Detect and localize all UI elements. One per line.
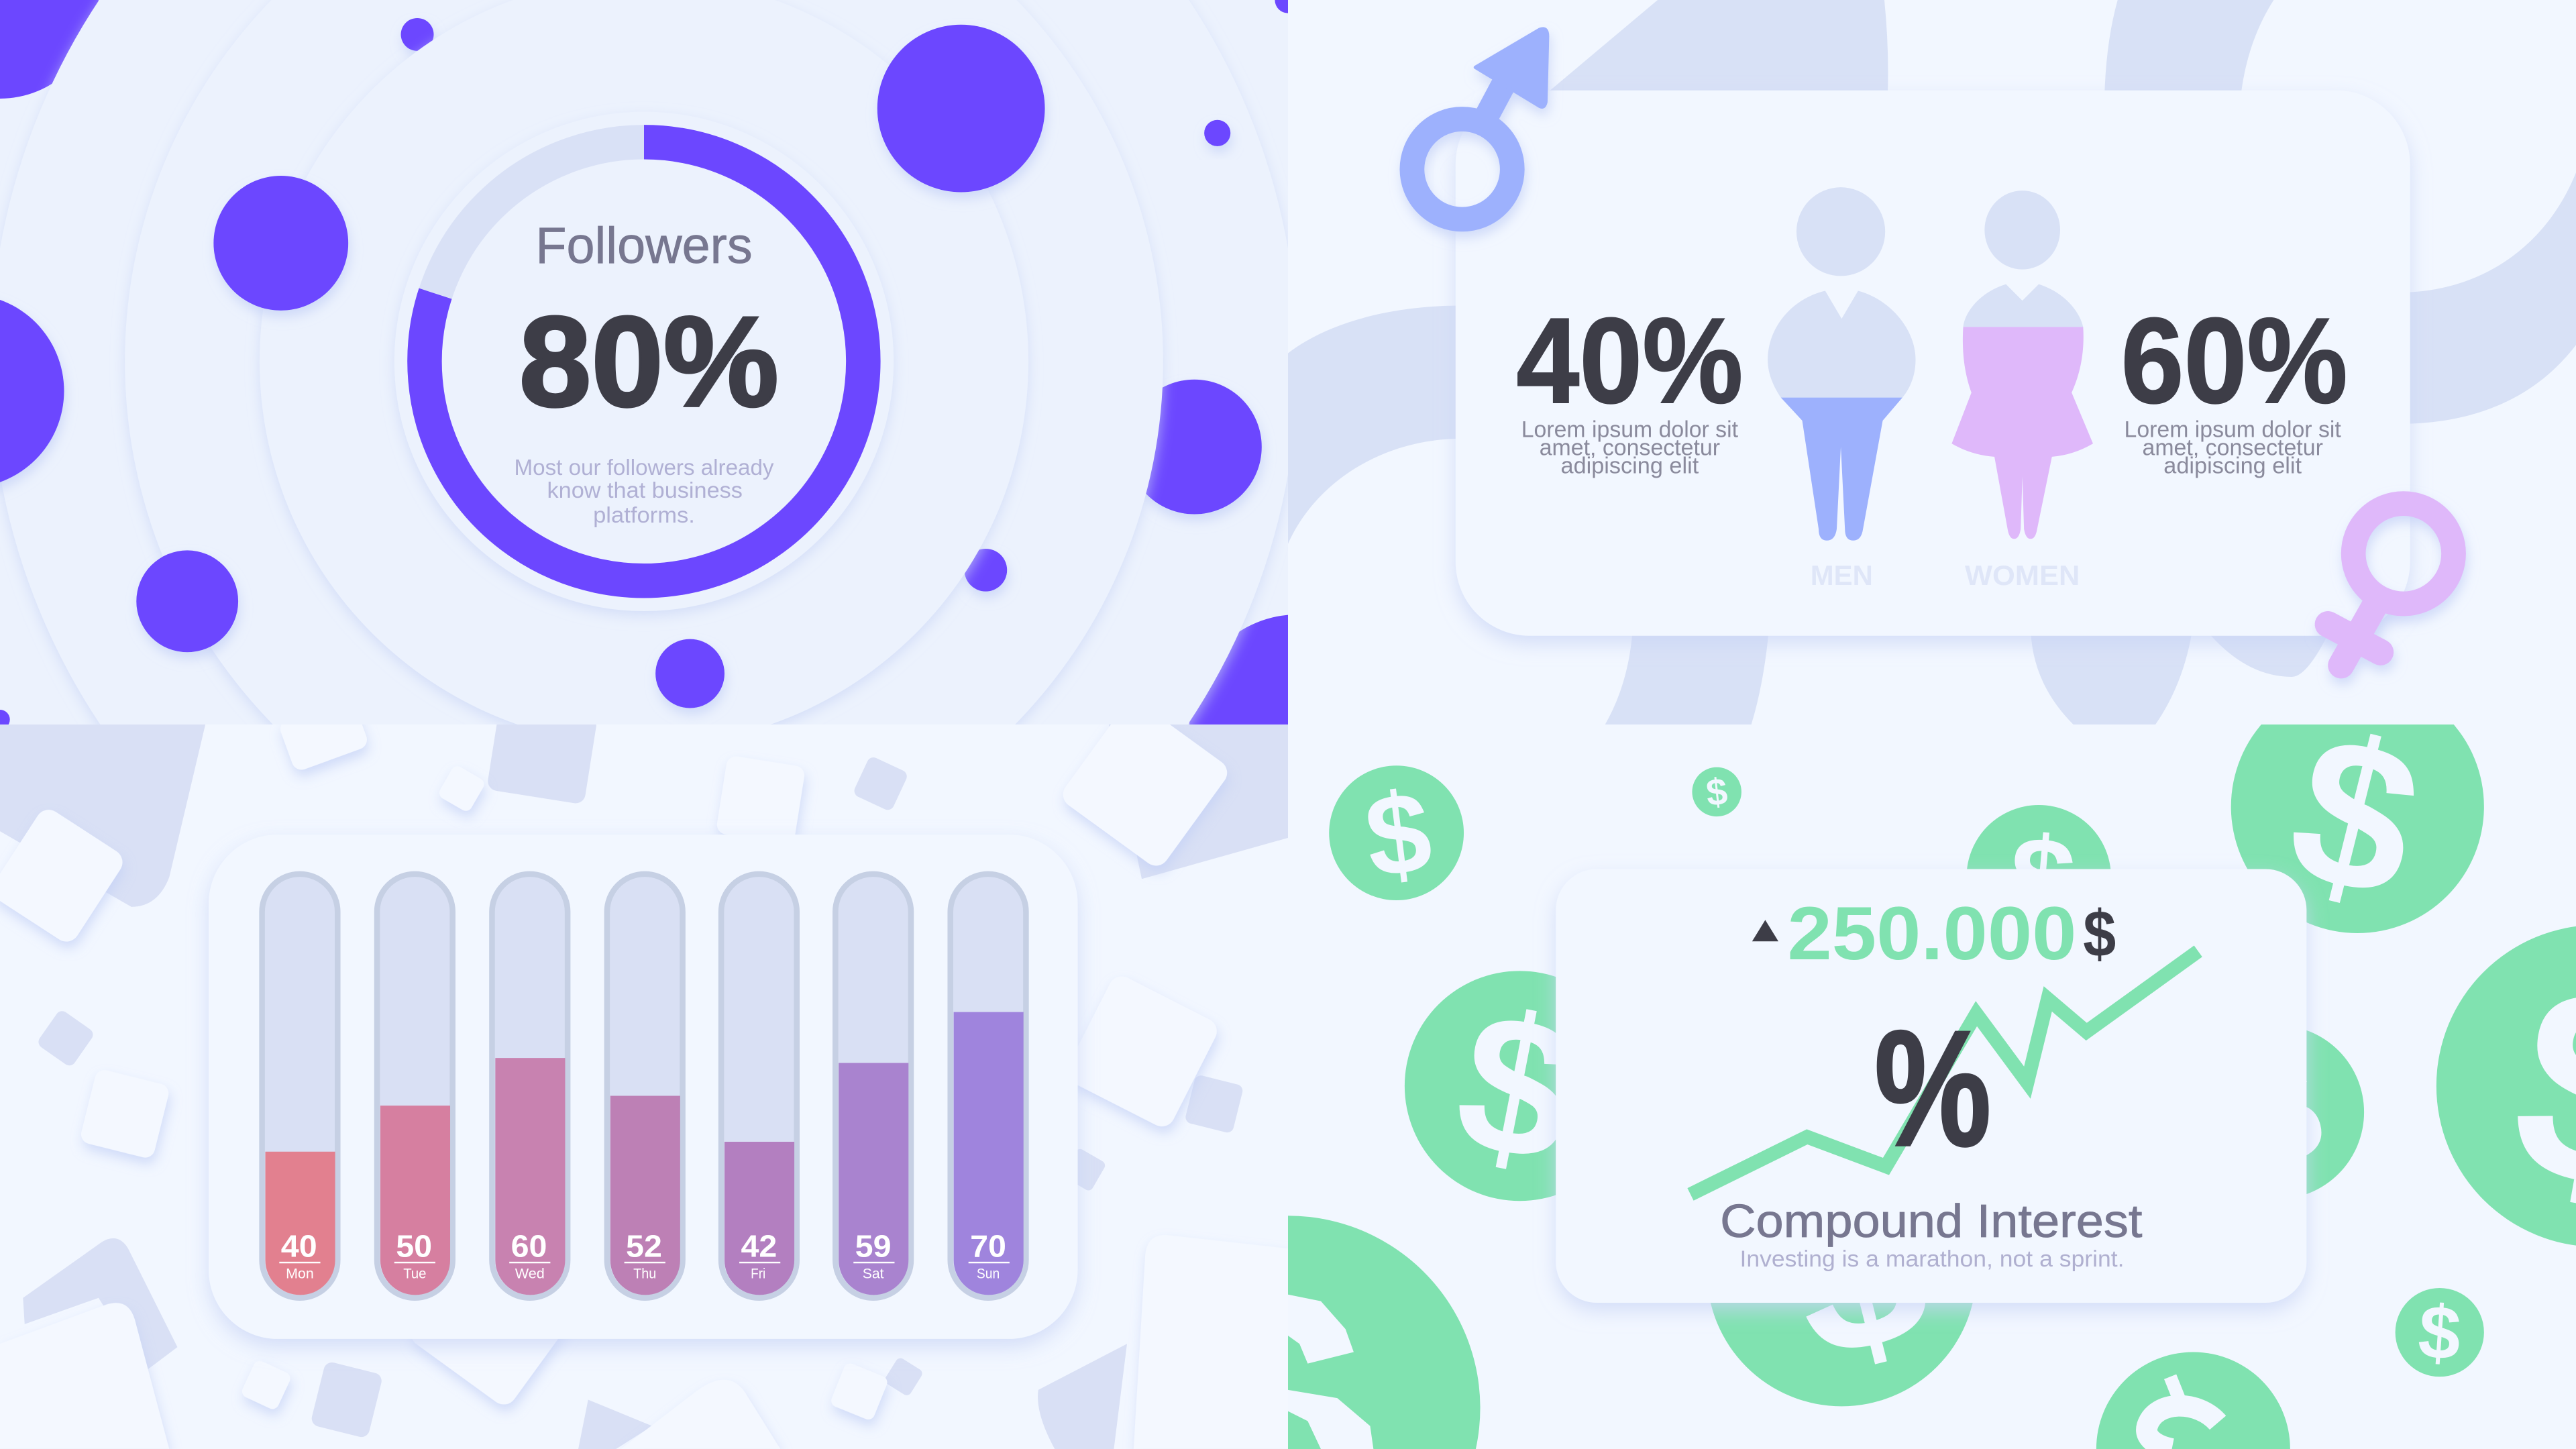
text block: men: Lorem ipsum dolor sit bbox=[1521, 417, 1738, 442]
background white shapes bbox=[0, 696, 1288, 1449]
coin: bottom left, cropped dollar mark bbox=[1288, 1216, 1481, 1449]
background bands bbox=[1288, 0, 2576, 724]
purple dot: top right bbox=[1204, 120, 1230, 146]
bar: Fri: 42 bbox=[741, 1228, 777, 1263]
bar: Thu: Thu bbox=[633, 1266, 656, 1281]
purple circle: right bbox=[1127, 380, 1262, 515]
text block: women bbox=[2125, 417, 2341, 478]
donut backing disc bbox=[394, 112, 894, 611]
dollar coins: $ bbox=[2217, 1023, 2337, 1203]
description text bbox=[515, 455, 774, 528]
percent sign: % bbox=[1874, 996, 1991, 1180]
bar: Fri bbox=[721, 874, 797, 1298]
bar: Thu: 52 bbox=[626, 1228, 662, 1263]
figure: man bbox=[1768, 187, 1916, 541]
bar: Tue bbox=[377, 874, 453, 1298]
card bbox=[1556, 869, 2306, 1303]
bar: Wed bbox=[492, 874, 568, 1298]
bar: Fri: Fri bbox=[751, 1266, 765, 1281]
concentric ring 2 bbox=[122, 141, 1171, 724]
bar: Sun: 70 bbox=[970, 1228, 1006, 1263]
purple circle: left bbox=[213, 176, 348, 311]
bar: Tue: 50 bbox=[396, 1228, 432, 1263]
card bbox=[1456, 91, 2410, 636]
label: women: WOMEN bbox=[1965, 559, 2080, 591]
bar: Mon bbox=[262, 874, 337, 1298]
bar: Sat: Sat bbox=[863, 1266, 884, 1281]
concentric ring 3 bbox=[260, 0, 1028, 746]
dollar coins: $ bbox=[1358, 767, 1438, 902]
coin: bottom, cropped dollar mark bbox=[2096, 1352, 2290, 1449]
bar: Mon: Mon bbox=[286, 1266, 314, 1281]
dollar coins: $ bbox=[2270, 688, 2440, 944]
bar: Tue: Tue bbox=[403, 1266, 427, 1281]
line chart bbox=[1690, 951, 2198, 1194]
dollar coins: $ bbox=[1764, 1129, 1950, 1409]
value: 80%: 80% bbox=[519, 290, 779, 433]
bar: Sat: 59 bbox=[855, 1228, 892, 1263]
text block: women: Lorem ipsum dolor sit bbox=[2125, 417, 2341, 442]
icon: up triangle bbox=[1752, 920, 1778, 941]
bar: Thu bbox=[607, 874, 683, 1298]
heading: Compound Interest: Compound Interest bbox=[1720, 1195, 2142, 1247]
value: 40%: 40% bbox=[1516, 293, 1743, 429]
purple circle: lower left bbox=[136, 550, 238, 652]
outer purple circles bbox=[0, 0, 1288, 724]
icon: female symbol bbox=[2328, 504, 2454, 665]
value: 250.000: 250.000 bbox=[1787, 891, 2077, 975]
label: men: MEN bbox=[1811, 559, 1873, 591]
bar: Sun: Sun bbox=[977, 1266, 1000, 1281]
subtitle: Investing is a marathon, not a sprint. bbox=[1739, 1246, 2125, 1272]
bar: Sat bbox=[835, 874, 911, 1298]
text block: men bbox=[1521, 417, 1738, 478]
concentric ring 1 bbox=[0, 0, 1288, 724]
purple dot: top bbox=[401, 18, 434, 51]
dollar coins: $ bbox=[2003, 811, 2080, 948]
purple circle: left edge bbox=[0, 294, 64, 488]
panel: compound interest bbox=[1288, 680, 2576, 1449]
description text: Most our followers already bbox=[515, 455, 774, 480]
panel: followers bbox=[0, 0, 1288, 724]
bar: Wed: Wed bbox=[515, 1266, 545, 1281]
panel: weekly bars bbox=[0, 696, 1288, 1449]
panel: men and women bbox=[1288, 0, 2576, 724]
value: 60%: 60% bbox=[2121, 293, 2348, 429]
text block: women: amet, consectetur bbox=[2142, 435, 2323, 460]
text block: women: adipiscing elit bbox=[2163, 453, 2302, 478]
dollar coins: $ bbox=[1704, 770, 1729, 814]
donut chart 80 percent bbox=[425, 142, 863, 581]
background blue shapes bbox=[0, 702, 1288, 1449]
dollar coins: $ bbox=[1442, 969, 1591, 1205]
dollar coins bbox=[1329, 680, 2576, 1409]
card bbox=[209, 835, 1078, 1339]
purple dot: lower right bbox=[965, 549, 1007, 592]
description text: platforms. bbox=[593, 503, 695, 528]
purple circle: upper right bbox=[877, 25, 1045, 193]
currency sign: $ bbox=[2083, 896, 2116, 970]
figure: woman bbox=[1951, 191, 2093, 539]
heading: Followers: Followers bbox=[535, 217, 753, 274]
purple circle: bottom bbox=[655, 639, 724, 708]
text block: men: amet, consectetur bbox=[1540, 435, 1720, 460]
bar: Mon: 40 bbox=[281, 1228, 317, 1263]
bar: Wed: 60 bbox=[511, 1228, 547, 1263]
text block: men: adipiscing elit bbox=[1561, 453, 1699, 478]
bar: Sun bbox=[951, 874, 1026, 1298]
description text: know that business bbox=[547, 478, 743, 503]
icon: male symbol bbox=[1412, 29, 1548, 219]
dollar coins: $ bbox=[2416, 1289, 2463, 1376]
